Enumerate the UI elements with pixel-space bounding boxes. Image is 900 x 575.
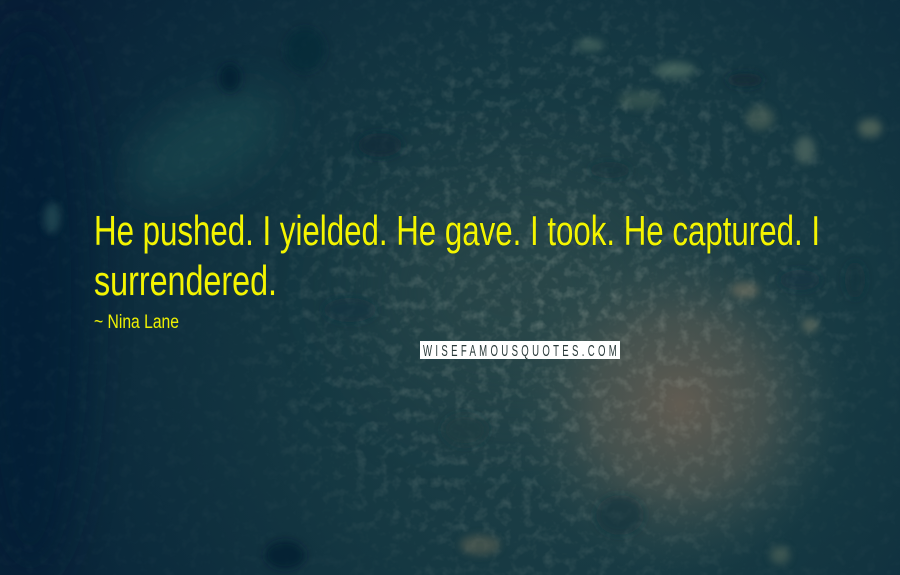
author attribution: ~ Nina Lane (94, 312, 179, 333)
quote text (94, 207, 820, 304)
watermark logo: WISEFAMOUSQUOTES.COM (423, 341, 617, 360)
quote text: surrendered. (94, 257, 277, 304)
